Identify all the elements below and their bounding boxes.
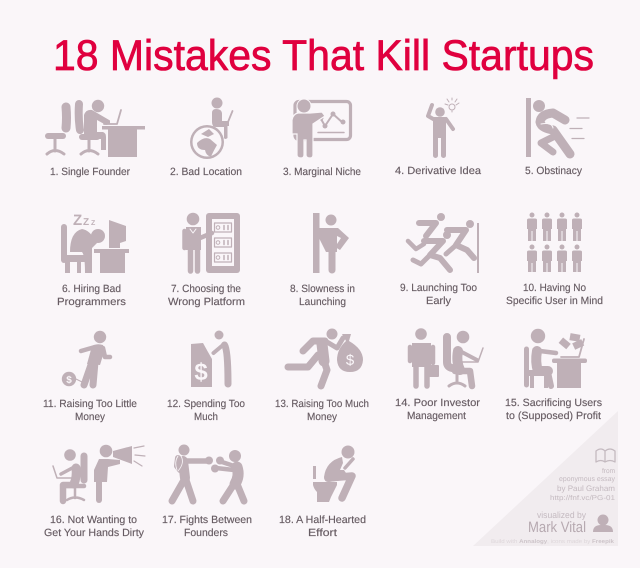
label: Programmers bbox=[57, 296, 126, 308]
item 4: derivative idea bbox=[395, 98, 481, 177]
item 14: poor investor management bbox=[395, 328, 483, 422]
label: Wrong Platform bbox=[168, 296, 245, 308]
icon: open book bbox=[596, 449, 615, 462]
label bbox=[506, 282, 603, 307]
item 9: launching too early bbox=[400, 213, 479, 307]
item 13: raising too much money bbox=[275, 328, 369, 423]
label: 12. Spending Too bbox=[167, 398, 245, 410]
icon: person running into wall bbox=[526, 98, 589, 157]
item 3: marginal niche bbox=[283, 99, 361, 178]
icon: programmer asleep at desk: Z bbox=[91, 220, 96, 227]
label: 10. Having No bbox=[523, 282, 586, 294]
label: 7. Choosing the bbox=[171, 283, 241, 295]
label: Launching bbox=[299, 296, 346, 308]
icon: person thinking on toilet bbox=[313, 446, 354, 502]
item 15: sacrificing users bbox=[505, 329, 602, 422]
icon: person at ATM: $ bbox=[194, 359, 208, 386]
item 17: fights between founders bbox=[162, 444, 252, 539]
label: 5. Obstinacy bbox=[525, 165, 583, 177]
label: 2. Bad Location bbox=[170, 166, 242, 178]
label: Founders bbox=[184, 527, 228, 539]
label: 6. Hiring Bad bbox=[62, 283, 121, 295]
item 1: single founder bbox=[47, 100, 145, 178]
item 2: bad location bbox=[170, 98, 242, 178]
icon: two chairs, founder at desk bbox=[47, 100, 145, 157]
source text: from bbox=[602, 467, 615, 475]
label bbox=[167, 398, 245, 423]
icon: runner with money bag: $ bbox=[346, 352, 355, 369]
label: 18. A Half-Hearted bbox=[279, 514, 366, 526]
icon: person on globe bbox=[190, 98, 232, 159]
icon: man with briefcase and seated investor bbox=[410, 328, 483, 386]
label: Much bbox=[194, 411, 218, 423]
label bbox=[279, 514, 366, 539]
label bbox=[395, 397, 481, 422]
icon: man beside server rack bbox=[184, 213, 240, 273]
credits panel bbox=[473, 411, 618, 546]
icon: two fighters boxing bbox=[172, 444, 244, 501]
icon: author bbox=[593, 514, 613, 532]
label bbox=[275, 398, 369, 423]
icon: programmer asleep at desk: Z bbox=[83, 217, 89, 228]
item 7: choosing the wrong platform bbox=[168, 213, 245, 308]
item 10: no specific user bbox=[506, 212, 603, 307]
triangle background bbox=[473, 411, 618, 546]
icon: person at laptop and boss with megaphone bbox=[53, 445, 145, 501]
icon: programmer asleep at desk bbox=[63, 212, 129, 273]
label: 16. Not Wanting to bbox=[50, 514, 137, 526]
label bbox=[290, 283, 355, 308]
label: Management bbox=[407, 410, 466, 422]
label: 4. Derivative Idea bbox=[395, 165, 481, 177]
item 12: spending too much bbox=[167, 330, 245, 423]
label: 15. Sacrificing Users bbox=[505, 397, 602, 409]
item 5: obstinacy bbox=[525, 98, 589, 177]
source text: by Paul Graham bbox=[557, 484, 615, 493]
label bbox=[168, 283, 245, 308]
icon: crowd of eight people bbox=[527, 212, 582, 272]
build credit: Build with Annalogy , icons made by Freepik bbox=[491, 539, 615, 545]
label: 13. Raising Too Much bbox=[275, 398, 369, 410]
icon: three runners reaching a line bbox=[408, 213, 479, 273]
label: Get Your Hands Dirty bbox=[44, 527, 145, 539]
icon: presenter and chart board bbox=[292, 99, 350, 158]
item 8: slowness in launching bbox=[290, 213, 355, 308]
label: 1. Single Founder bbox=[50, 166, 130, 178]
label: Specific User in Mind bbox=[506, 295, 603, 307]
icon: man with light bulb bbox=[428, 98, 459, 156]
source text bbox=[550, 467, 615, 502]
visualized by: visualized by bbox=[537, 510, 586, 520]
label: to (Supposed) Profit bbox=[506, 410, 601, 422]
label: 11. Raising Too Little bbox=[43, 398, 137, 410]
icon: person at desk with flying money bbox=[524, 329, 587, 388]
source text: http://fnf.vc/PG-01 bbox=[550, 494, 615, 502]
label: 8. Slowness in bbox=[290, 283, 355, 295]
icon: programmer asleep at desk: Z bbox=[73, 212, 82, 229]
item 11: raising too little money bbox=[43, 331, 137, 423]
label bbox=[400, 282, 477, 307]
label: 3. Marginal Niche bbox=[283, 166, 361, 178]
label: 9. Launching Too bbox=[400, 282, 477, 294]
icon: person dragging ball and chain of money: $ bbox=[66, 375, 72, 386]
label bbox=[57, 283, 126, 308]
icon: person leaning on wall bbox=[313, 213, 349, 273]
label bbox=[505, 397, 602, 422]
label bbox=[43, 398, 137, 423]
item 6: hiring bad programmers bbox=[57, 212, 129, 308]
label bbox=[162, 514, 252, 539]
visualized by: Mark Vital bbox=[528, 519, 586, 536]
label: Money bbox=[75, 411, 106, 423]
source text: eponymous essay bbox=[559, 476, 615, 483]
title: 18 Mistakes That Kill Startups bbox=[53, 32, 594, 80]
item 16: not wanting to get hands dirty bbox=[44, 445, 145, 539]
item 18: half-hearted effort bbox=[279, 446, 366, 539]
label bbox=[44, 514, 145, 539]
visualized by bbox=[528, 510, 586, 536]
label: Early bbox=[426, 295, 452, 307]
label: Money bbox=[307, 411, 338, 423]
label: Effort bbox=[308, 527, 337, 539]
label: 17. Fights Between bbox=[162, 514, 252, 526]
label: 14. Poor Investor bbox=[395, 397, 481, 409]
